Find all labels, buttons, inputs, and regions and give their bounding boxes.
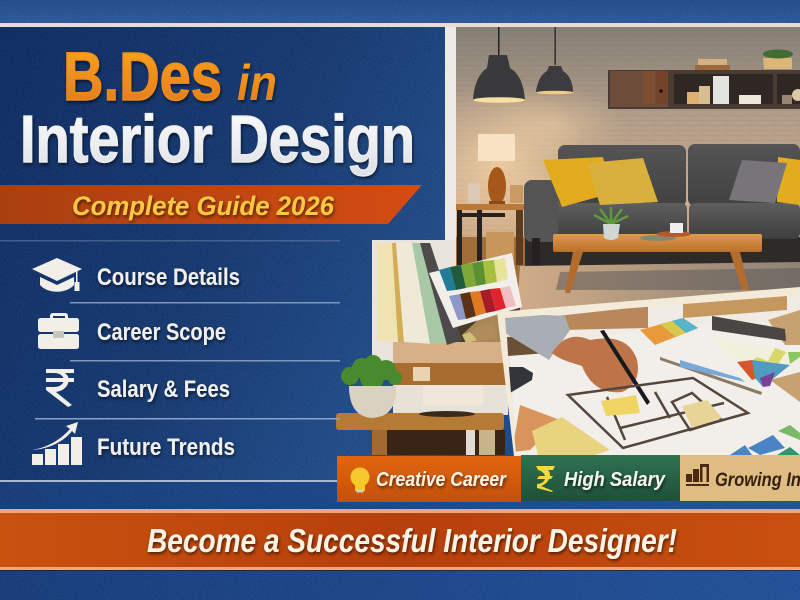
bottom banner (0, 509, 800, 571)
tag: high salary: High Salary (564, 469, 666, 491)
wood floor (456, 237, 531, 297)
icon: rupee (536, 466, 555, 492)
item: course details (32, 258, 240, 292)
bottom banner: Become a Successful Interior Designer! (147, 522, 677, 559)
tag: creative career: Creative Career (376, 469, 507, 491)
rolled paper (712, 316, 786, 341)
icon: light bulb (350, 468, 370, 492)
side table with tray (336, 392, 505, 455)
icon: rising bar chart (32, 422, 82, 465)
wall shelf (608, 50, 800, 109)
side table (456, 183, 524, 265)
item: salary and fees (46, 369, 230, 407)
photo: living room (445, 27, 800, 310)
subtitle ribbon (0, 185, 422, 224)
photo: hand sketching floor plan (497, 287, 800, 456)
small plant (594, 207, 628, 240)
hand (552, 337, 638, 392)
pendant lamp large (473, 27, 525, 103)
potted plant (341, 355, 402, 418)
pendant lamp small (536, 27, 574, 94)
floor plan (568, 378, 748, 448)
pen (600, 330, 650, 405)
sleeve (505, 313, 570, 360)
table lamp (478, 134, 515, 205)
top cream border (0, 23, 800, 27)
sample cards (514, 405, 558, 452)
sofa (524, 144, 800, 266)
notebook (508, 367, 533, 393)
fabric swatch fan (377, 243, 497, 345)
title line: Interior Design: Interior Design (20, 102, 415, 177)
list dividers (0, 240, 340, 482)
rug (517, 262, 800, 312)
icon: rupee (46, 369, 74, 407)
colour strips top (640, 318, 698, 345)
feature tags (337, 455, 800, 502)
left navy panel (0, 27, 445, 480)
photo: material samples and side table (336, 240, 522, 455)
tag: creative career (337, 456, 521, 502)
item: future trends (32, 422, 235, 465)
topic list (32, 258, 240, 465)
tag: growing industry (680, 455, 800, 501)
colour swatch bottom right (730, 445, 752, 455)
item: course details: Course Details (97, 264, 240, 291)
colour card (429, 253, 522, 328)
icon: graduation cap (32, 258, 82, 292)
coffee table (553, 223, 762, 293)
colour fan right (713, 337, 800, 387)
item: future trends: Future Trends (97, 434, 235, 461)
dark floor (525, 237, 800, 277)
pencil and ruler (660, 357, 762, 395)
title line: B.Des in: B.Des (63, 38, 222, 115)
yellow pillows (543, 157, 800, 207)
title line: B.Des in: in (237, 55, 277, 111)
item: career scope (38, 313, 226, 349)
subtitle ribbon: Complete Guide 2026 (72, 191, 335, 221)
icon: briefcase (38, 313, 79, 349)
item: career scope: Career Scope (97, 319, 226, 346)
item: salary and fees: Salary & Fees (97, 376, 230, 403)
tag: high salary (521, 455, 680, 501)
grey pillow (729, 160, 787, 203)
title (20, 38, 415, 177)
icon: bar chart (686, 464, 709, 486)
